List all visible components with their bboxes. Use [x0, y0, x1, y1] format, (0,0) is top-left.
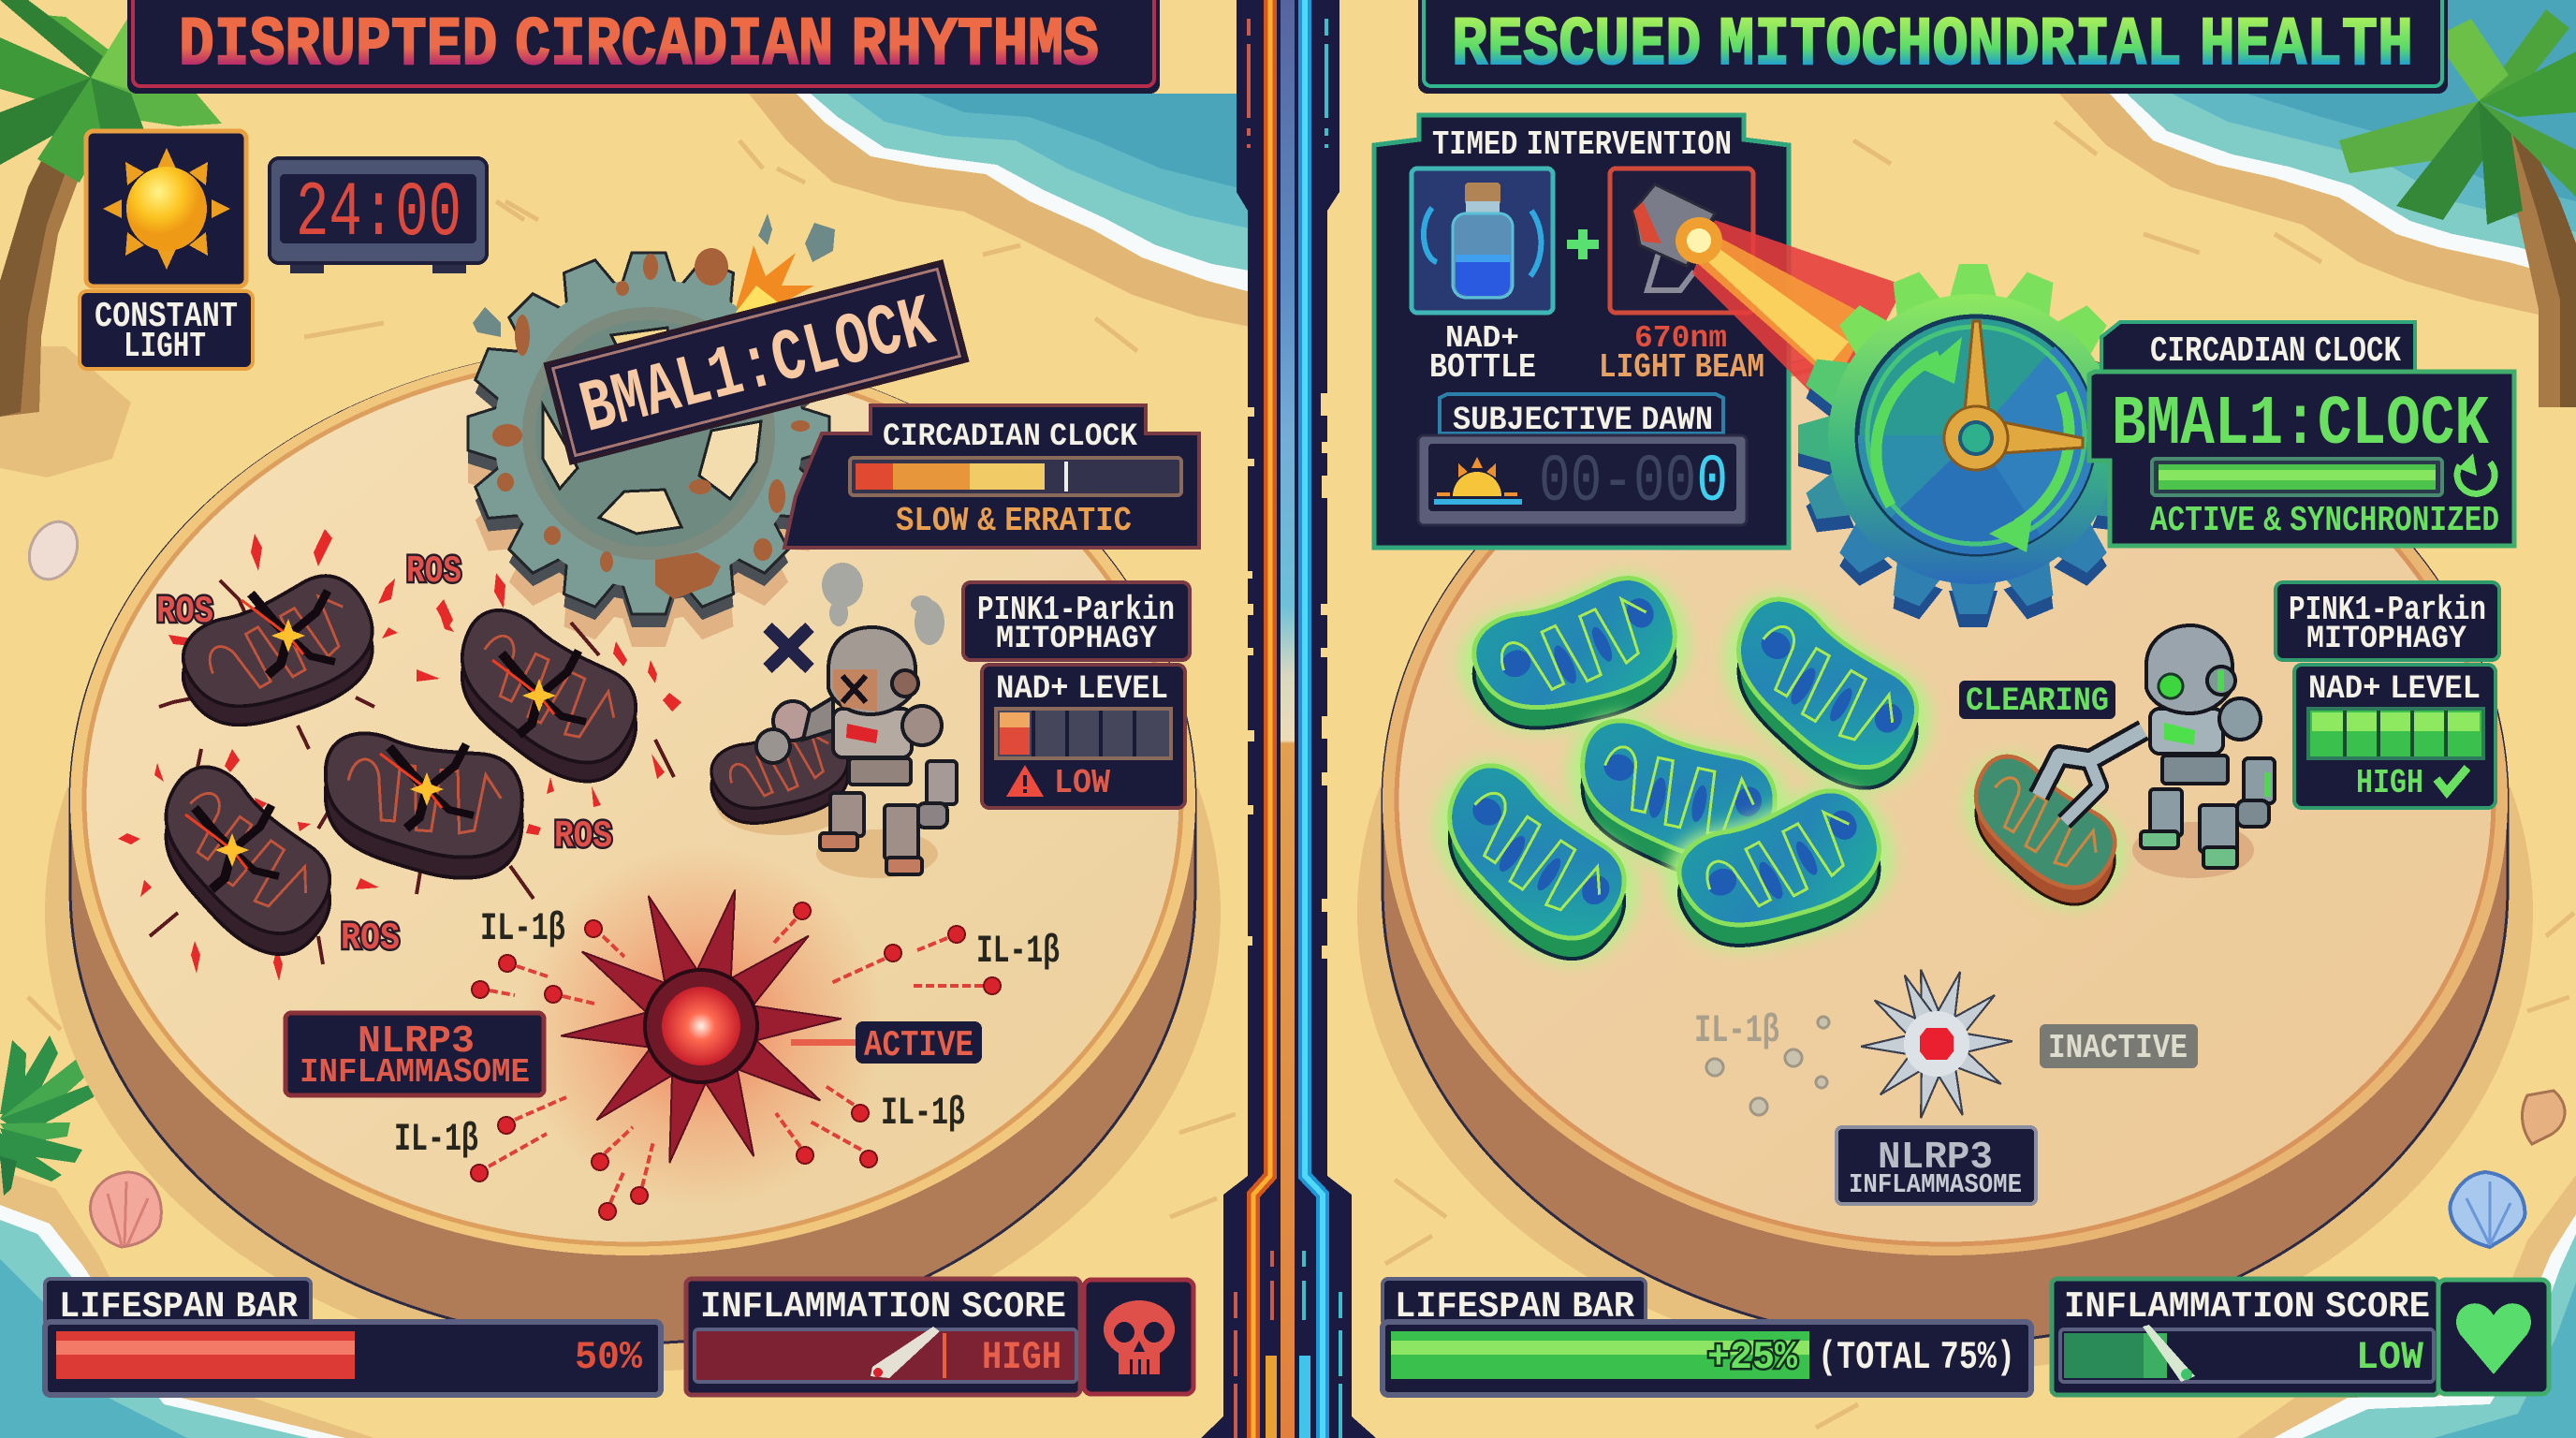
lifespan bar: total 75%	[1383, 1279, 2031, 1395]
water: bottom left shoreline	[0, 1170, 374, 1438]
digital clock 24:00	[270, 158, 487, 273]
panel: mitophagy label, left: PINK1-Parkin	[977, 591, 1175, 629]
icon panel: constant light sun	[86, 131, 246, 286]
cleaning robot	[2039, 625, 2275, 878]
shell: white	[21, 514, 86, 587]
panel: mitophagy label, right: PINK1-Parkin	[2289, 591, 2486, 629]
IL-1β labels, left: IL-1β	[881, 1091, 965, 1136]
ROS labels: ROS	[406, 550, 461, 594]
broken rusty gear	[468, 248, 829, 647]
subjective dawn tab: SUBJECTIVE DAWN	[1453, 402, 1713, 439]
smoke	[822, 563, 944, 645]
IL-1β labels, left	[394, 906, 1060, 1162]
plate: BMAL1:CLOCK (broken): BMAL1:CLOCK	[573, 283, 944, 453]
shell: blue	[2451, 1172, 2525, 1247]
IL-1β labels, left: IL-1β	[480, 906, 565, 951]
label: active	[791, 1021, 982, 1066]
panel: NAD+ level low: NAD+ LEVEL	[996, 670, 1168, 708]
icon: heart	[2438, 1280, 2549, 1394]
digital clock 24:00: 24:00	[296, 169, 461, 257]
panel: circadian clock status, slow and erratic: CIRCADIAN CLOCK	[883, 419, 1138, 455]
inactive NLRP3	[1861, 967, 2012, 1121]
panel: BMAL1:CLOCK active and synchronized: BMAL1:CLOCK	[2112, 386, 2489, 464]
gear holes	[543, 405, 578, 489]
panel: NAD+ level high: HIGH	[2356, 764, 2423, 802]
panel: circadian clock status, slow and erratic	[784, 405, 1199, 548]
light beam	[1676, 217, 1905, 417]
label: NLRP3 inflammasome, left: NLRP3	[358, 1020, 475, 1064]
damaged mitochondrion 3	[320, 731, 526, 882]
icon: plus	[1567, 229, 1599, 259]
thin cracks around mitochondria	[150, 580, 674, 964]
panel: NAD+ level high: NAD+ LEVEL	[2308, 670, 2481, 708]
panel: mitophagy label, right: MITOPHAGY	[2306, 622, 2467, 657]
subjective dawn display	[1418, 435, 1747, 525]
inflammation score: high: HIGH	[982, 1335, 1061, 1380]
shell: pink	[91, 1172, 161, 1247]
labels under cards: NAD+	[1445, 321, 1519, 356]
damaged mitochondrion 2	[437, 599, 654, 798]
healthy mitochondrion B	[1708, 586, 1939, 807]
panel: mitophagy label, left	[963, 582, 1190, 660]
label: NLRP3 inflammasome, left: INFLAMMASOME	[300, 1053, 530, 1092]
ROS labels: ROS	[156, 591, 213, 634]
panel: timed intervention: TIMED INTERVENTION	[1432, 125, 1732, 164]
ROS labels: ROS	[554, 815, 612, 858]
inflammation score: high: INFLAMMATION SCORE	[700, 1286, 1066, 1328]
lifespan bar: total 75%: (TOTAL 75%)	[1818, 1335, 2015, 1380]
healthy mitochondrion D	[1417, 752, 1647, 978]
label: constant light: LIGHT	[124, 327, 206, 367]
healthy mitochondrion A	[1462, 553, 1691, 764]
label: active: ACTIVE	[864, 1025, 973, 1066]
card: 670nm light	[1610, 169, 1753, 313]
clock hands	[1964, 321, 1990, 421]
lifespan bar: 50%	[45, 1279, 661, 1395]
lifespan bar: total 75%: LIFESPAN BAR	[1395, 1286, 1635, 1328]
NLRP3 inflammasome burst	[519, 844, 884, 1209]
lifespan bar: total 75%: +25%	[1707, 1335, 1798, 1380]
IL-1β labels, left: IL-1β	[976, 929, 1060, 974]
IL-1β dots and trails, left	[471, 902, 1001, 1220]
panel: circadian clock tab, right	[2101, 322, 2415, 372]
panel: NAD+ level high	[2294, 665, 2496, 808]
healthy mitochondrion E	[1667, 765, 1896, 982]
ROS particles and cracks	[118, 529, 681, 981]
icon: refresh	[2457, 453, 2495, 493]
labels under cards: 670nm	[1634, 321, 1727, 356]
IL-1β faded, right	[1694, 1008, 1829, 1115]
rotation arrows	[1876, 356, 1939, 506]
label: constant light	[80, 291, 253, 369]
panel: timed intervention	[1374, 115, 1789, 548]
water: top left shoreline	[749, 94, 1254, 328]
label: constant light: CONSTANT	[95, 297, 238, 337]
panel: circadian clock status, slow and erratic: SLOW & ERRATIC	[896, 502, 1132, 540]
labels under cards: LIGHT BEAM	[1599, 348, 1764, 387]
palm leaf: bottom left	[0, 1035, 103, 1196]
damaged mitochondrion being cleared	[1953, 746, 2132, 919]
panel: BMAL1:CLOCK active and synchronized	[2089, 372, 2514, 546]
label: clearing: CLEARING	[1966, 682, 2109, 720]
labels under cards: BOTTLE	[1429, 348, 1536, 387]
label: inactive: INACTIVE	[2048, 1029, 2188, 1067]
palm tree: top right	[2339, 9, 2576, 407]
centre divider	[1201, 0, 1376, 1438]
healthy mitochondrion C	[1568, 713, 1786, 890]
lifespan bar: 50%: LIFESPAN BAR	[59, 1286, 299, 1328]
icon: skull	[1084, 1280, 1193, 1394]
panel: NAD+ level low	[982, 665, 1185, 808]
water: bottom right shoreline	[2237, 1175, 2576, 1438]
label: NLRP3 inflammasome, left	[285, 1013, 544, 1095]
inflammation score: high	[686, 1279, 1080, 1395]
label: NLRP3 inflammasome, right: INFLAMMASOME	[1849, 1169, 2022, 1200]
palm tree: top left	[0, 0, 222, 477]
ROS labels	[156, 550, 612, 961]
lifespan bar: 50%: 50%	[575, 1335, 643, 1380]
claw arm	[2039, 730, 2144, 822]
panel: mitophagy label, left: MITOPHAGY	[996, 622, 1158, 657]
panel: BMAL1:CLOCK active and synchronized: ACTIVE & SYNCHRONIZED	[2150, 501, 2499, 541]
icon: X mark, mitophagy blocked	[768, 627, 810, 668]
panel: NAD+ level low: LOW	[1054, 764, 1110, 802]
debris and spark	[473, 213, 835, 337]
healthy gear and clock dial	[1798, 264, 2148, 627]
damaged mitochondrion 1	[171, 551, 389, 760]
title: rescued mitochondrial health: RESCUED MITOCHONDRIAL HEALTH	[1452, 7, 2413, 84]
carried damaged mitochondrion	[704, 703, 859, 847]
broken robot	[704, 563, 957, 878]
gear cast shadow	[468, 312, 829, 647]
label: NLRP3 inflammasome, right	[1837, 1127, 2036, 1204]
panel: mitophagy label, right	[2276, 582, 2499, 660]
platform disc: left	[45, 345, 1221, 1372]
shell: tan	[2523, 1091, 2565, 1144]
inflammation score: low	[2052, 1279, 2438, 1395]
card: NAD+ bottle	[1412, 169, 1553, 313]
damaged mitochondrion 4	[135, 754, 353, 974]
labels under cards	[1429, 321, 1764, 387]
IL-1β labels, left: IL-1β	[394, 1117, 478, 1162]
label: NLRP3 inflammasome, right: NLRP3	[1878, 1137, 1993, 1180]
subjective dawn display: 00-000	[1539, 446, 1728, 521]
panel: circadian clock tab, right: CIRCADIAN CLOCK	[2150, 331, 2401, 372]
IL-1β faded, right: IL-1β	[1694, 1008, 1779, 1053]
inflammation score: low: INFLAMMATION SCORE	[2064, 1286, 2430, 1328]
platform disc: right	[1357, 345, 2533, 1372]
ROS labels: ROS	[341, 917, 400, 961]
water: top right shoreline	[2059, 0, 2576, 323]
inflammation score: low: LOW	[2356, 1335, 2424, 1380]
title: disrupted circadian rhythms: DISRUPTED CIRCADIAN RHYTHMS	[179, 7, 1099, 84]
